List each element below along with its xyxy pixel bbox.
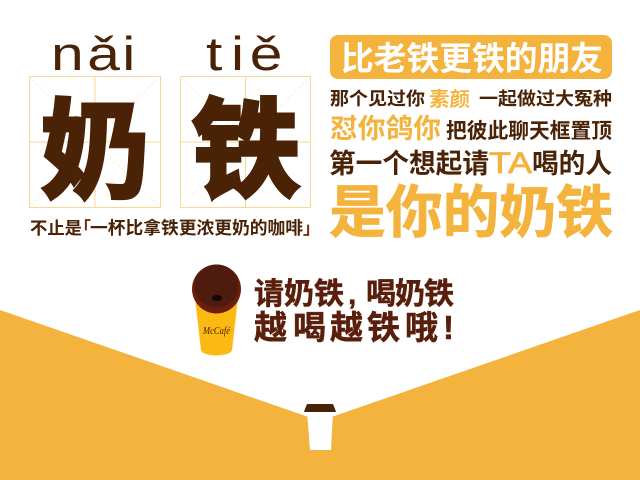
grid box: tie character (180, 76, 311, 211)
text line 3 (329, 147, 612, 180)
text line 2: 怼你鸽你 (330, 114, 441, 144)
text line 1: 那个见过你 (330, 89, 425, 109)
text line 4: big highlight: 是你的奶铁 (329, 181, 613, 245)
subtitle under characters: 「 (74, 219, 91, 238)
slogan line 2: 越喝越铁哦! (254, 309, 454, 346)
text line 1: 一起做过大冤种 (479, 89, 612, 109)
text line 3: 喝的人 (532, 149, 612, 179)
text line 3: 第一个想起请 (329, 149, 489, 179)
subtitle under characters: 一杯比拿铁更浓更奶的咖啡 (90, 218, 304, 238)
text line 1: 素颜 (429, 88, 470, 111)
text line 2 (330, 114, 612, 144)
slogan line 1: 请奶铁,喝奶铁 (254, 278, 454, 311)
icon: McCafe coffee cup (192, 264, 241, 356)
icon: white paper cup at bottom (304, 404, 336, 450)
grid box: nai character (29, 76, 160, 212)
heading character: tie: 铁 (192, 90, 300, 211)
subtitle under characters: 」 (303, 219, 320, 238)
text line 2: 把彼此聊天框置顶 (446, 120, 612, 143)
background: yellow envelope shape (0, 310, 640, 480)
cup logo text: McCafé (202, 325, 231, 337)
pinyin: tie: tiě (206, 28, 282, 81)
text line 1 (330, 88, 612, 111)
text line 3: TA (489, 147, 532, 180)
subtitle under characters: 不止是 (30, 219, 82, 238)
banner: friend headline: 比老铁更铁的朋友 (341, 40, 603, 77)
heading character: nai: 奶 (41, 91, 149, 212)
pinyin: nai: nǎi (51, 28, 135, 81)
